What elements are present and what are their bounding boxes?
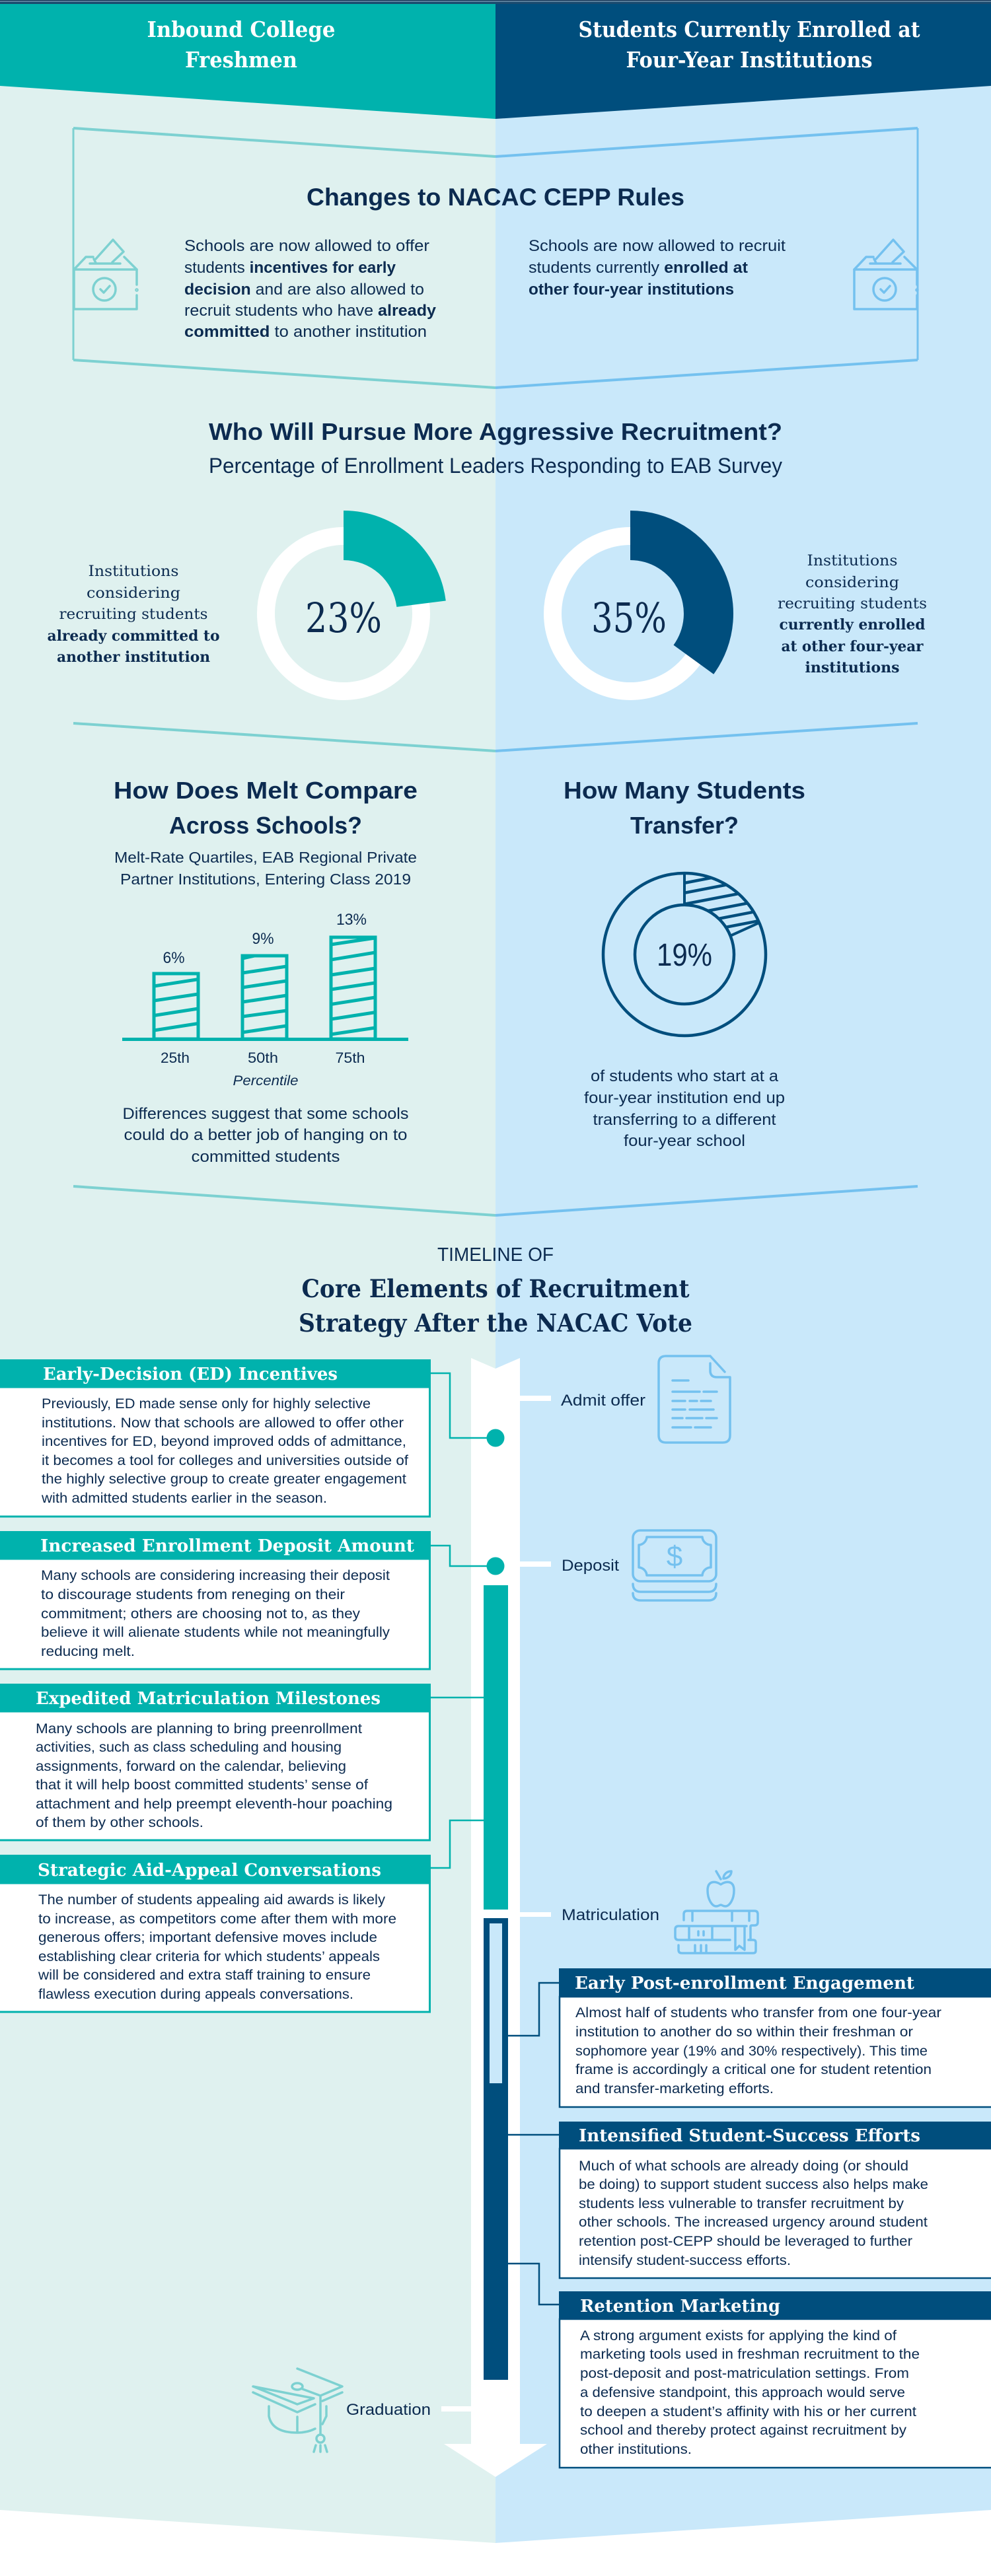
header: students currently enrolled: [495, 4, 991, 119]
text block: already committed: recruiting students: [59, 606, 207, 623]
text block: differences: Differences suggest that some schools: [123, 1105, 408, 1123]
panel: aggressive recruitment survey: [48, 418, 927, 691]
card: expedited matriculation milestones: assignments, forward on the calendar, believing: [36, 1759, 346, 1774]
card: retention marketing: post-deposit and post-matriculation settings. From: [580, 2366, 909, 2381]
icon: ballot box left: [74, 240, 137, 309]
card: strategic aid-appeal conversations: to increase, as competitors come after them with more: [38, 1912, 396, 1927]
background: left column: [0, 0, 495, 2543]
card: early-decision incentives: it becomes a tool for colleges and universities outside of: [42, 1453, 408, 1468]
donut chart: 19 percent: 19%: [657, 938, 712, 973]
text block: transfer stat: transferring to a different: [593, 1111, 776, 1129]
icon: money stack: $: [667, 1540, 682, 1573]
card: expedited matriculation milestones: Many schools are planning to bring preenrollment: [36, 1721, 362, 1736]
icon: document: [659, 1356, 730, 1443]
card: early post-enrollment engagement: [559, 1968, 991, 2107]
text block: already committed: another institution: [57, 649, 210, 666]
card: expedited matriculation milestones: that it will help boost committed students’ sense of: [36, 1777, 368, 1793]
text block: right rule change: other four-year institutions: [529, 281, 734, 299]
card: strategic aid-appeal conversations: flawless execution during appeals conversations.: [38, 1987, 353, 2002]
text block: currently enrolled: [778, 553, 927, 676]
milestone: deposit: [520, 1530, 716, 1600]
header: students currently enrolled: Four-Year Institutions: [626, 47, 872, 73]
connector: aid appeal: [430, 1820, 484, 1868]
card: early-decision incentives: the highly selective group to create greater engagement: [42, 1472, 406, 1487]
card: early-decision incentives: incentives for ED, beyond improved odds of admittance,: [42, 1434, 406, 1449]
donut chart: 23 percent: [266, 511, 446, 691]
card: expedited matriculation milestones: activities, such as class scheduling and housing: [36, 1740, 342, 1755]
icon: books and apple: [675, 1871, 758, 1953]
text block: right rule change: Schools are now allowed to recruit: [529, 237, 786, 255]
card: early post-enrollment engagement: and transfer-marketing efforts.: [575, 2081, 774, 2096]
text block: currently enrolled: currently enrolled: [780, 616, 925, 633]
card: early-decision incentives: institutions. Now that schools are allowed to offer other: [42, 1415, 404, 1431]
bar chart: melt rate: 50th: [248, 1050, 278, 1066]
card: intensified student-success efforts: other schools. The increased urgency around student: [579, 2215, 928, 2230]
text block: already committed: Institutions: [89, 563, 178, 580]
text block: left rule change: committed to another institution: [184, 323, 427, 341]
text block: left rule change: Schools are now allowed to offer: [184, 237, 429, 255]
card: intensified student-success efforts: be doing) to support student success also helps make: [579, 2177, 928, 2192]
card: increased enrollment deposit amount: Increased Enrollment Deposit Amount: [40, 1536, 414, 1556]
text block: differences: could do a better job of hanging on to: [124, 1126, 407, 1144]
text block: already committed: considering: [87, 585, 180, 602]
card: early-decision incentives: Early-Decision (ED) Incentives: [43, 1365, 338, 1384]
card: retention marketing: marketing tools used in freshman recruitment to the: [580, 2347, 920, 2362]
bar: 25th percentile: [154, 974, 198, 1039]
icon: ballot box right: [854, 240, 918, 309]
bar chart: melt rate: 13%: [336, 911, 367, 929]
bar chart: melt rate: 9%: [252, 930, 274, 948]
card: increased enrollment deposit amount: commitment; others are choosing not to, as they: [41, 1606, 361, 1622]
card: early post-enrollment engagement: Early Post-enrollment Engagement: [575, 1974, 914, 1993]
card: intensified student-success efforts: students less vulnerable to transfer recruitment by: [579, 2196, 904, 2211]
text block: transfer stat: four-year school: [624, 1132, 745, 1150]
connector: post-enrollment: [508, 1983, 560, 2036]
text block: already committed: [48, 563, 219, 666]
header: inbound college freshmen: Freshmen: [185, 47, 297, 73]
header bands: [0, 0, 991, 119]
bar chart: melt rate: 6%: [163, 949, 185, 967]
header: inbound college freshmen: [0, 4, 495, 119]
heading: timeline: Strategy After the NACAC Vote: [299, 1308, 692, 1338]
text block: left rule change: [184, 237, 437, 341]
bar chart: melt rate: Percentile: [233, 1073, 299, 1089]
subheading: melt-rate quartiles: [114, 849, 417, 888]
milestone: matriculation: [508, 1871, 758, 1953]
text block: left rule change: recruit students who have already: [184, 302, 437, 320]
heading: timeline: [299, 1244, 692, 1338]
card: retention marketing: other institutions.: [580, 2442, 692, 2457]
text block: left rule change: decision and are also allowed to: [184, 281, 424, 299]
text block: right rule change: students currently enrolled at: [529, 259, 748, 277]
text block: differences: [123, 1105, 408, 1166]
connector: early decision: [430, 1373, 505, 1447]
donut chart: 19 percent: [603, 866, 773, 1036]
milestone: graduation: Graduation: [346, 2401, 431, 2419]
card: early post-enrollment engagement: sophomore year (19% and 30% respectively). This time: [575, 2044, 928, 2059]
bar chart: melt rate: 25th: [161, 1050, 190, 1066]
panel: transfer: [564, 777, 805, 1150]
connector: deposit amount: [430, 1546, 505, 1575]
bar chart: melt rate: 75th: [336, 1050, 365, 1066]
milestone: admit offer: Admit offer: [561, 1392, 645, 1410]
donut chart: 35 percent: 35%: [591, 594, 667, 642]
card: early-decision incentives: [0, 1359, 431, 1517]
text block: transfer stat: four-year institution end up: [584, 1089, 785, 1107]
card: increased enrollment deposit amount: [0, 1531, 431, 1669]
card: increased enrollment deposit amount: believe it will alienate students while not meaningfully: [41, 1625, 390, 1640]
card: expedited matriculation milestones: attachment and help preempt eleventh-hour poaching: [36, 1797, 392, 1812]
card: strategic aid-appeal conversations: generous offers; important defensive moves include: [38, 1930, 377, 1945]
bar chart: melt rate: [122, 911, 408, 1089]
text block: currently enrolled: considering: [805, 575, 899, 591]
text block: currently enrolled: recruiting students: [778, 596, 927, 612]
card: strategic aid-appeal conversations: [0, 1855, 431, 2012]
card: strategic aid-appeal conversations: The number of students appealing aid awards is likely: [38, 1892, 386, 1908]
header: students currently enrolled: Students Currently Enrolled at: [579, 17, 920, 42]
donut chart: 23 percent: 23%: [305, 594, 382, 642]
card: early post-enrollment engagement: Almost half of students who transfer from one four-year: [575, 2005, 941, 2021]
timeline bar: navy enrollment phase: [484, 1918, 508, 2380]
card: early post-enrollment engagement: frame is accordingly a critical one for student retention: [575, 2062, 932, 2077]
heading: who will pursue: Who Will Pursue More Aggressive Recruitment?: [209, 418, 782, 445]
heading: melt: [114, 777, 418, 839]
card: increased enrollment deposit amount: to discourage students from reneging on their: [41, 1587, 345, 1602]
text block: already committed: already committed to: [48, 627, 219, 645]
subheading: melt-rate quartiles: Melt-Rate Quartiles, EAB Regional Private: [114, 849, 417, 866]
card: increased enrollment deposit amount: reducing melt.: [41, 1644, 135, 1659]
card: early-decision incentives: Previously, ED made sense only for highly selective: [42, 1396, 371, 1412]
milestone: matriculation: Matriculation: [562, 1906, 659, 1924]
background: right column: [495, 0, 991, 2543]
heading: transfer: [564, 777, 805, 839]
text block: transfer stat: of students who start at a: [591, 1067, 779, 1085]
card: intensified student-success efforts: retention post-CEPP should be leveraged to further: [579, 2234, 912, 2249]
panel: changes to NACAC CEPP rules: [73, 128, 918, 388]
heading: changes: Changes to NACAC CEPP Rules: [307, 184, 684, 211]
icon: money stack: [633, 1530, 716, 1600]
card: retention marketing: school and thereby protect against recruitment by: [580, 2423, 907, 2438]
panel: melt comparison: [114, 777, 418, 1166]
card: strategic aid-appeal conversations: establishing clear criteria for which students’ appeals: [38, 1949, 380, 1964]
milestone: admit offer: [520, 1356, 730, 1443]
donut chart: 35 percent: [552, 511, 733, 691]
card: intensified student-success efforts: Intensified Student-Success Efforts: [579, 2126, 920, 2146]
card: retention marketing: a defensive standpoint, this approach would serve: [580, 2385, 905, 2400]
text block: differences: committed students: [192, 1148, 340, 1166]
milestone: graduation: [253, 2369, 471, 2452]
text block: left rule change: students incentives for early: [184, 259, 396, 277]
heading: timeline: Core Elements of Recruitment: [301, 1274, 690, 1303]
card: retention marketing: Retention Marketing: [580, 2297, 780, 2316]
connector: matriculation milestones: [430, 1697, 484, 1698]
subheading: survey: Percentage of Enrollment Leaders Responding to EAB Survey: [209, 454, 782, 478]
card: retention marketing: to deepen a student’s affinity with his or her current: [580, 2404, 916, 2419]
card: strategic aid-appeal conversations: Strategic Aid-Appeal Conversations: [38, 1861, 381, 1880]
heading: timeline: TIMELINE OF: [437, 1244, 554, 1266]
card: early-decision incentives: with admitted students earlier in the season.: [41, 1491, 327, 1506]
bar: 50th percentile: [242, 956, 287, 1039]
connector: student success: [508, 2134, 560, 2135]
text block: right rule change: [529, 237, 786, 299]
connector: retention marketing: [508, 2264, 560, 2305]
card: increased enrollment deposit amount: Many schools are considering increasing their deposit: [41, 1568, 390, 1583]
milestone: deposit: Deposit: [562, 1557, 619, 1575]
card: expedited matriculation milestones: of them by other schools.: [36, 1815, 203, 1830]
bar: 75th percentile: [331, 937, 375, 1039]
icon: graduation cap: [253, 2369, 342, 2452]
text block: transfer stat: [584, 1067, 785, 1150]
heading: melt: Across Schools?: [169, 812, 362, 839]
card: intensified student-success efforts: intensify student-success efforts.: [579, 2253, 791, 2268]
text block: currently enrolled: Institutions: [807, 553, 897, 569]
timeline bar: teal recruitment phase: [484, 1585, 508, 1910]
text block: currently enrolled: institutions: [805, 659, 900, 676]
card: early post-enrollment engagement: institution to another do so within their freshman or: [575, 2024, 913, 2040]
card: intensified student-success efforts: [559, 2122, 991, 2278]
card: strategic aid-appeal conversations: will be considered and extra staff training to ensure: [38, 1968, 371, 1983]
heading: melt: How Does Melt Compare: [114, 777, 418, 804]
subheading: melt-rate quartiles: Partner Institutions, Entering Class 2019: [120, 871, 411, 888]
card: intensified student-success efforts: Much of what schools are already doing (or should: [579, 2159, 908, 2174]
card: expedited matriculation milestones: [0, 1684, 431, 1840]
heading: transfer: Transfer?: [630, 812, 739, 839]
text block: currently enrolled: at other four-year: [781, 638, 924, 655]
heading: transfer: How Many Students: [564, 777, 805, 804]
card: expedited matriculation milestones: Expedited Matriculation Milestones: [36, 1689, 381, 1709]
timeline arrow: [444, 1358, 547, 2477]
card: retention marketing: [559, 2291, 991, 2468]
card: retention marketing: A strong argument exists for applying the kind of: [580, 2328, 897, 2343]
header: inbound college freshmen: Inbound College: [147, 17, 336, 42]
